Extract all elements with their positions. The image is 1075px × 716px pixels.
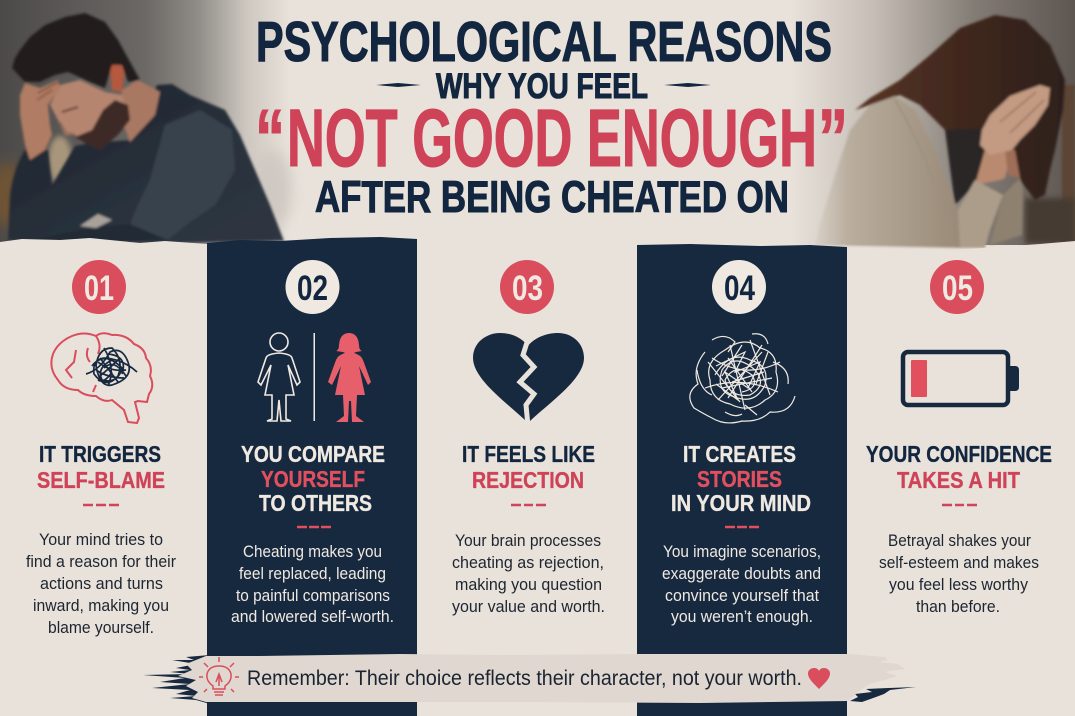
heading accent: SELF-BLAME [37,467,165,493]
column: panel 5 background [847,241,1075,716]
icon: broken heart [473,333,584,426]
heading accent: YOURSELF [261,466,365,492]
title line 3: ” [818,93,848,184]
number badge 05: 05 [942,269,973,308]
divider dashes [725,526,759,528]
photo: woman covering her face [790,0,1075,248]
number badge 02 [286,260,340,314]
body text: find a reason for their [26,553,176,571]
number badge 03 [500,260,554,314]
heading line three: IN YOUR MIND [671,490,811,516]
body text: self-esteem and makes [879,554,1039,572]
heading: YOU COMPARE [241,441,385,467]
body text: Your brain processes [455,532,601,550]
body text: than before. [916,598,1000,616]
body text: and lowered self-worth. [231,608,394,626]
body text: feel replaced, leading [239,565,386,583]
callout banner: remember [143,654,916,704]
icon: heart [808,668,830,689]
icon: low battery [903,352,1019,405]
body text [452,532,605,616]
heading: IT FEELS LIKE [462,441,595,467]
brush stroke background [178,654,905,703]
column: panel 4 background [637,244,847,716]
number badge 04 [712,260,766,314]
title dash right [664,83,711,87]
body text: actions and turns [40,575,163,593]
body text: You imagine scenarios, [663,543,821,561]
body text: exaggerate doubts and [662,565,821,583]
heading accent: REJECTION [472,467,584,493]
body text [662,543,821,626]
panel: 05 confidence [866,260,1052,616]
body text: convince yourself that [665,587,819,605]
title line 4: AFTER BEING CHEATED ON [315,173,789,222]
panel: 02 comparison [231,260,394,626]
title line 1: PSYCHOLOGICAL REASONS [256,10,832,74]
body text: cheating as rejection, [452,554,604,572]
panel: 04 stories [662,260,821,626]
divider dashes [511,504,546,506]
body text [26,531,176,637]
heading accent: TAKES A HIT [897,467,1020,493]
column: panel 3 background [417,241,637,716]
icon: two women silhouettes [258,333,371,422]
heading line three: TO OTHERS [259,490,372,516]
body text: you weren’t enough. [671,608,813,626]
number badge 03: 03 [512,269,543,308]
column: panel 1 background [0,238,207,716]
body text: inward, making you [33,597,169,615]
navy brush tail left [143,655,210,704]
icon: tangled scribble [690,334,795,423]
callout text: Remember: Their choice reflects their character, not your worth. [247,667,802,690]
title block [255,10,848,222]
body text: Cheating makes you [243,543,382,561]
panel: 01 self-blame [26,260,176,637]
body text: your value and worth. [452,598,605,616]
photo: man with head in hand [0,0,292,245]
title line 3: “ [255,93,285,184]
column: panel 2 background [207,237,417,716]
divider dashes [83,504,119,506]
body text: making you question [455,576,602,594]
body text: Betrayal shakes your [888,532,1031,550]
divider dashes [942,504,977,506]
icon: light bulb [199,657,239,695]
number badge 04: 04 [724,269,755,308]
title line 2: WHY YOU FEEL [436,67,648,106]
title line 3 [255,93,848,184]
heading: IT CREATES [683,441,796,467]
title dash left [376,83,421,87]
body text: to painful comparisons [236,587,390,605]
body text: you feel less worthy [889,576,1029,594]
body text [879,532,1039,616]
body text [231,543,394,626]
panel: 03 rejection [452,260,605,616]
number badge 01: 01 [84,269,114,308]
navy brush tail right [850,687,916,702]
divider dashes [297,526,331,528]
heading accent: STORIES [697,466,782,492]
body text: blame yourself. [48,619,154,637]
number badge 05 [930,260,984,314]
heading: IT TRIGGERS [39,441,161,467]
body text: Your mind tries to [39,531,163,549]
number badge 01 [72,260,126,314]
icon: brain with tangle [51,333,152,423]
number badge 02: 02 [297,269,328,308]
